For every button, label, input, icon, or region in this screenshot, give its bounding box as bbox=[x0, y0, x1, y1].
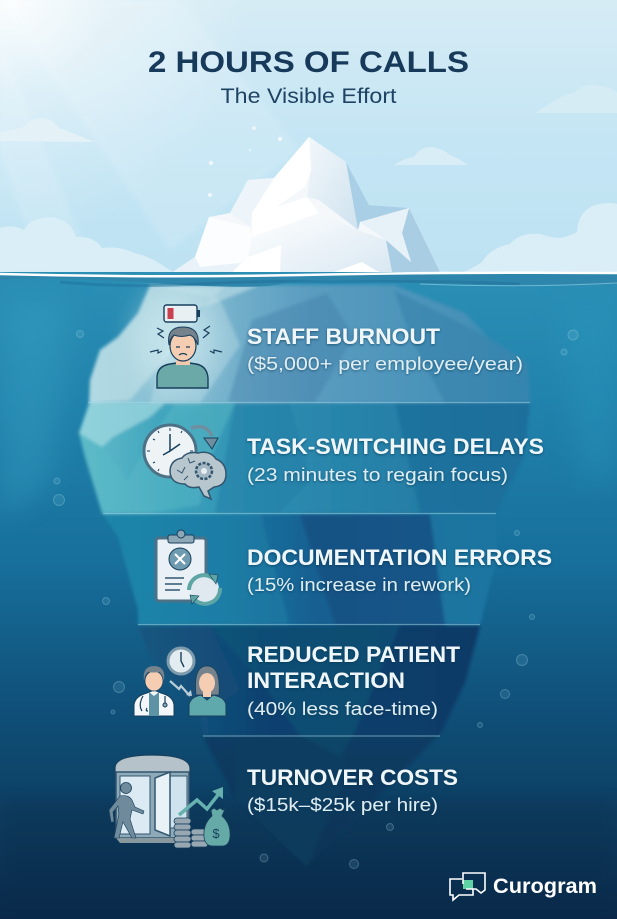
sun glow bbox=[0, 0, 617, 280]
sparkles bbox=[208, 126, 282, 197]
deep shadow bbox=[0, 800, 617, 919]
water side tint bbox=[0, 300, 617, 520]
item: turnover costs bbox=[109, 755, 458, 848]
shaded face bbox=[307, 137, 358, 230]
logo: Curogram bbox=[450, 873, 597, 900]
icon: low battery and stressed person bbox=[150, 305, 222, 388]
detail: documentation errors: (15% increase in rework) bbox=[247, 575, 471, 595]
item: staff burnout bbox=[150, 305, 523, 388]
icon: clipboard with refresh arrows bbox=[156, 530, 220, 604]
label: second line: INTERACTION bbox=[247, 668, 405, 693]
bubbles bbox=[54, 330, 578, 868]
band dividers bbox=[88, 402, 530, 736]
iceberg below water bbox=[77, 283, 530, 864]
clouds bbox=[0, 85, 617, 276]
bright faces bbox=[252, 137, 319, 237]
iceberg above water bbox=[165, 137, 440, 278]
detail: reduced patient interaction: (40% less face-time) bbox=[247, 699, 438, 719]
icon: revolving door, coins and money bag: $ bbox=[212, 826, 220, 841]
detail: turnover costs: ($15k–$25k per hire) bbox=[247, 795, 438, 815]
label: turnover costs: TURNOVER COSTS bbox=[247, 765, 458, 790]
icon: chat bubbles bbox=[450, 873, 485, 900]
icon: revolving door, coins and money bag bbox=[109, 755, 230, 848]
sea bbox=[0, 272, 617, 919]
icon: doctor, patient and clock bbox=[134, 648, 226, 716]
detail: staff burnout: ($5,000+ per employee/year) bbox=[247, 354, 523, 374]
waterline bbox=[0, 272, 617, 287]
sky background bbox=[0, 0, 617, 280]
title: 2 HOURS OF CALLS bbox=[148, 46, 469, 79]
icon: clock, brain and gear bbox=[144, 425, 226, 499]
sun rays bbox=[0, 0, 300, 270]
label: documentation errors: DOCUMENTATION ERRORS bbox=[247, 545, 552, 570]
glow behind first icon bbox=[135, 290, 215, 390]
label: reduced patient interaction: REDUCED PATIENT bbox=[247, 642, 461, 667]
wordmark: Curogram bbox=[493, 875, 597, 898]
detail: task-switching delays: (23 minutes to regain focus) bbox=[247, 465, 508, 485]
subtitle: The Visible Effort bbox=[220, 85, 397, 108]
item: task-switching delays bbox=[144, 425, 544, 499]
item: reduced patient interaction bbox=[134, 642, 461, 719]
label: task-switching delays: TASK-SWITCHING DELAYS bbox=[247, 434, 544, 459]
label: staff burnout: STAFF BURNOUT bbox=[247, 324, 441, 349]
item: documentation errors bbox=[156, 530, 552, 604]
